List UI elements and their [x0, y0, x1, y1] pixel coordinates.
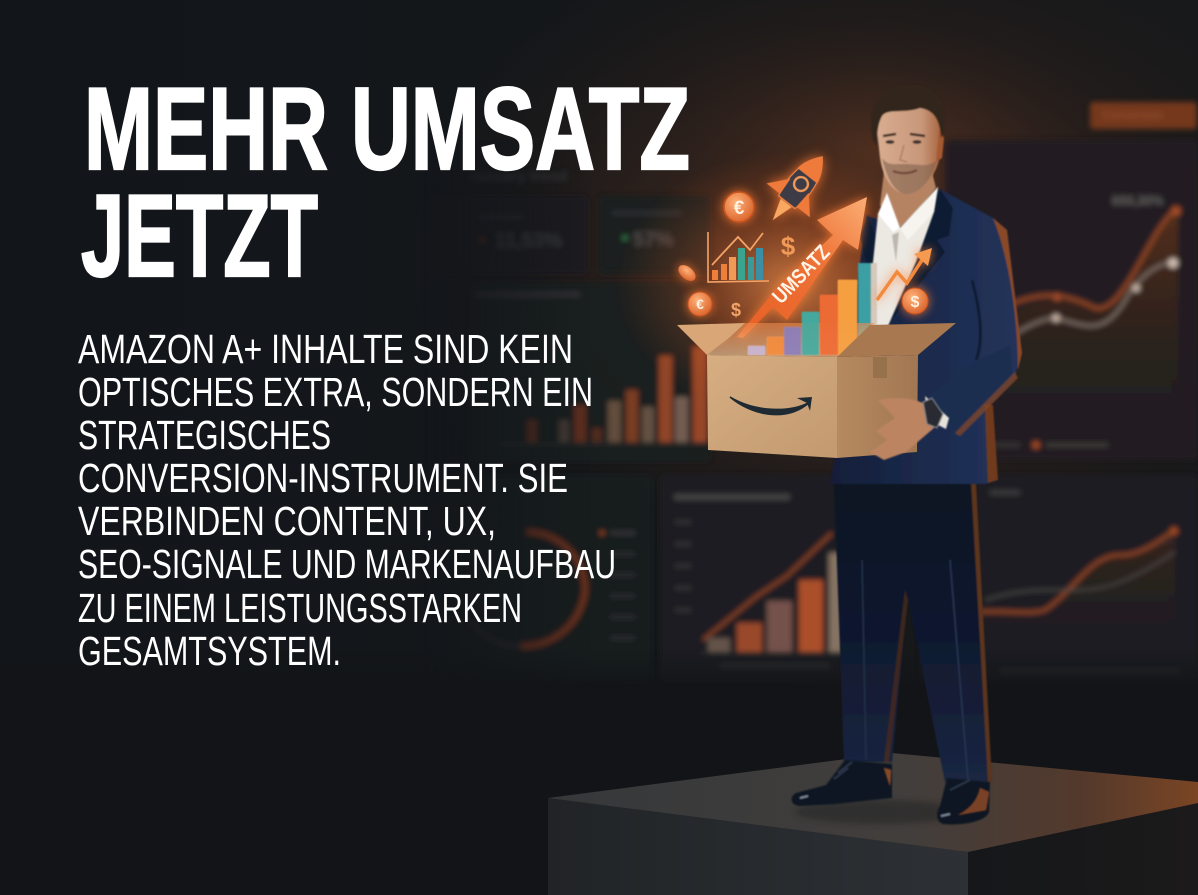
dashboard heading: January trend: [468, 168, 567, 185]
hand and watch: [870, 396, 949, 460]
body text: ZU EINEM LEISTUNGSSTARKEN: [78, 585, 522, 631]
panel: button: Conversion: [1102, 108, 1163, 122]
mini chart icon: [708, 232, 769, 282]
warm glow behind figure: [390, 0, 1198, 600]
body text: OPTISCHES EXTRA, SONDERN EIN: [78, 369, 593, 415]
blurred dashboard backdrop: [428, 102, 1198, 682]
box inner glow: [707, 323, 875, 357]
panel: line chart right: [945, 140, 1198, 460]
coin: small tilted: [675, 262, 699, 284]
title line two: JETZT: [81, 170, 318, 301]
warm glow behind head: [650, 20, 1110, 280]
right flap: [837, 323, 956, 357]
left fade over dashboard: [420, 140, 590, 700]
panel: KPI right: 57%: [633, 229, 673, 251]
podium front face: [548, 798, 968, 895]
panel: line chart right: 650,30%: [1112, 193, 1164, 208]
coin: euro large: [724, 192, 754, 222]
trousers: [834, 482, 992, 782]
head: [871, 85, 945, 194]
podium: [548, 753, 1198, 895]
left flap: [677, 323, 745, 355]
body text: GESAMTSYSTEM.: [78, 628, 341, 674]
dollar sign large: $: [781, 231, 796, 261]
neck: [880, 172, 936, 230]
amazon smile: [730, 397, 812, 415]
panel: donut chart: [430, 475, 652, 682]
shirt cuff: [925, 396, 949, 429]
shirt: [873, 187, 938, 326]
panel: line chart bottom right: [920, 475, 1198, 682]
body text: SEO-SIGNALE UND MARKENAUFBAU: [78, 541, 616, 587]
coin: euro small: €: [696, 296, 704, 312]
bottom fade over dashboard: [0, 650, 1198, 695]
title: [81, 63, 690, 301]
amazon box: [677, 280, 956, 458]
body text: [78, 326, 616, 674]
coin: euro small: [688, 292, 712, 316]
panel: bar chart bottom: [660, 475, 890, 682]
jacket: [830, 189, 1022, 484]
podium right face: [968, 803, 1198, 895]
front face: [707, 355, 837, 458]
left shoe: [791, 760, 892, 806]
bars rising from box: [748, 263, 877, 355]
big UMSATZ arrow: [737, 197, 867, 338]
tape: [873, 357, 887, 378]
panel: bar chart middle: [470, 282, 710, 462]
coin: tiny: [711, 328, 725, 340]
body text: STRATEGISCHES: [78, 412, 331, 458]
watch: [923, 398, 943, 428]
body text: VERBINDEN CONTENT, UX,: [78, 498, 496, 544]
title line one: MEHR UMSATZ: [84, 63, 690, 194]
person: [791, 85, 1022, 825]
right face: [837, 355, 918, 458]
panel: KPI right: [598, 196, 710, 274]
shoe shadows: [795, 800, 965, 824]
bars in front of inner glow: [748, 280, 857, 355]
panel: KPI left: [428, 196, 588, 274]
body text: AMAZON A+ INHALTE SIND KEIN: [78, 326, 573, 372]
hand: [870, 398, 934, 460]
coin: dollar on jacket: [902, 288, 928, 314]
body text: CONVERSION-INSTRUMENT. SIE: [78, 455, 568, 501]
orange core glow: [615, 150, 965, 420]
coin: euro large: €: [734, 198, 745, 219]
coin: dollar on jacket: $: [911, 294, 920, 311]
rocket icon: [751, 140, 844, 237]
panel: button: [1090, 102, 1197, 129]
arrow label: UMSATZ: [768, 241, 835, 308]
right shoe: [937, 778, 990, 824]
podium top: [548, 753, 1198, 852]
dollar sign small: $: [731, 300, 741, 320]
dark floor band: [0, 695, 1198, 895]
small zigzag arrow: [877, 248, 932, 300]
panel: KPI left: 11,53%: [495, 230, 562, 252]
